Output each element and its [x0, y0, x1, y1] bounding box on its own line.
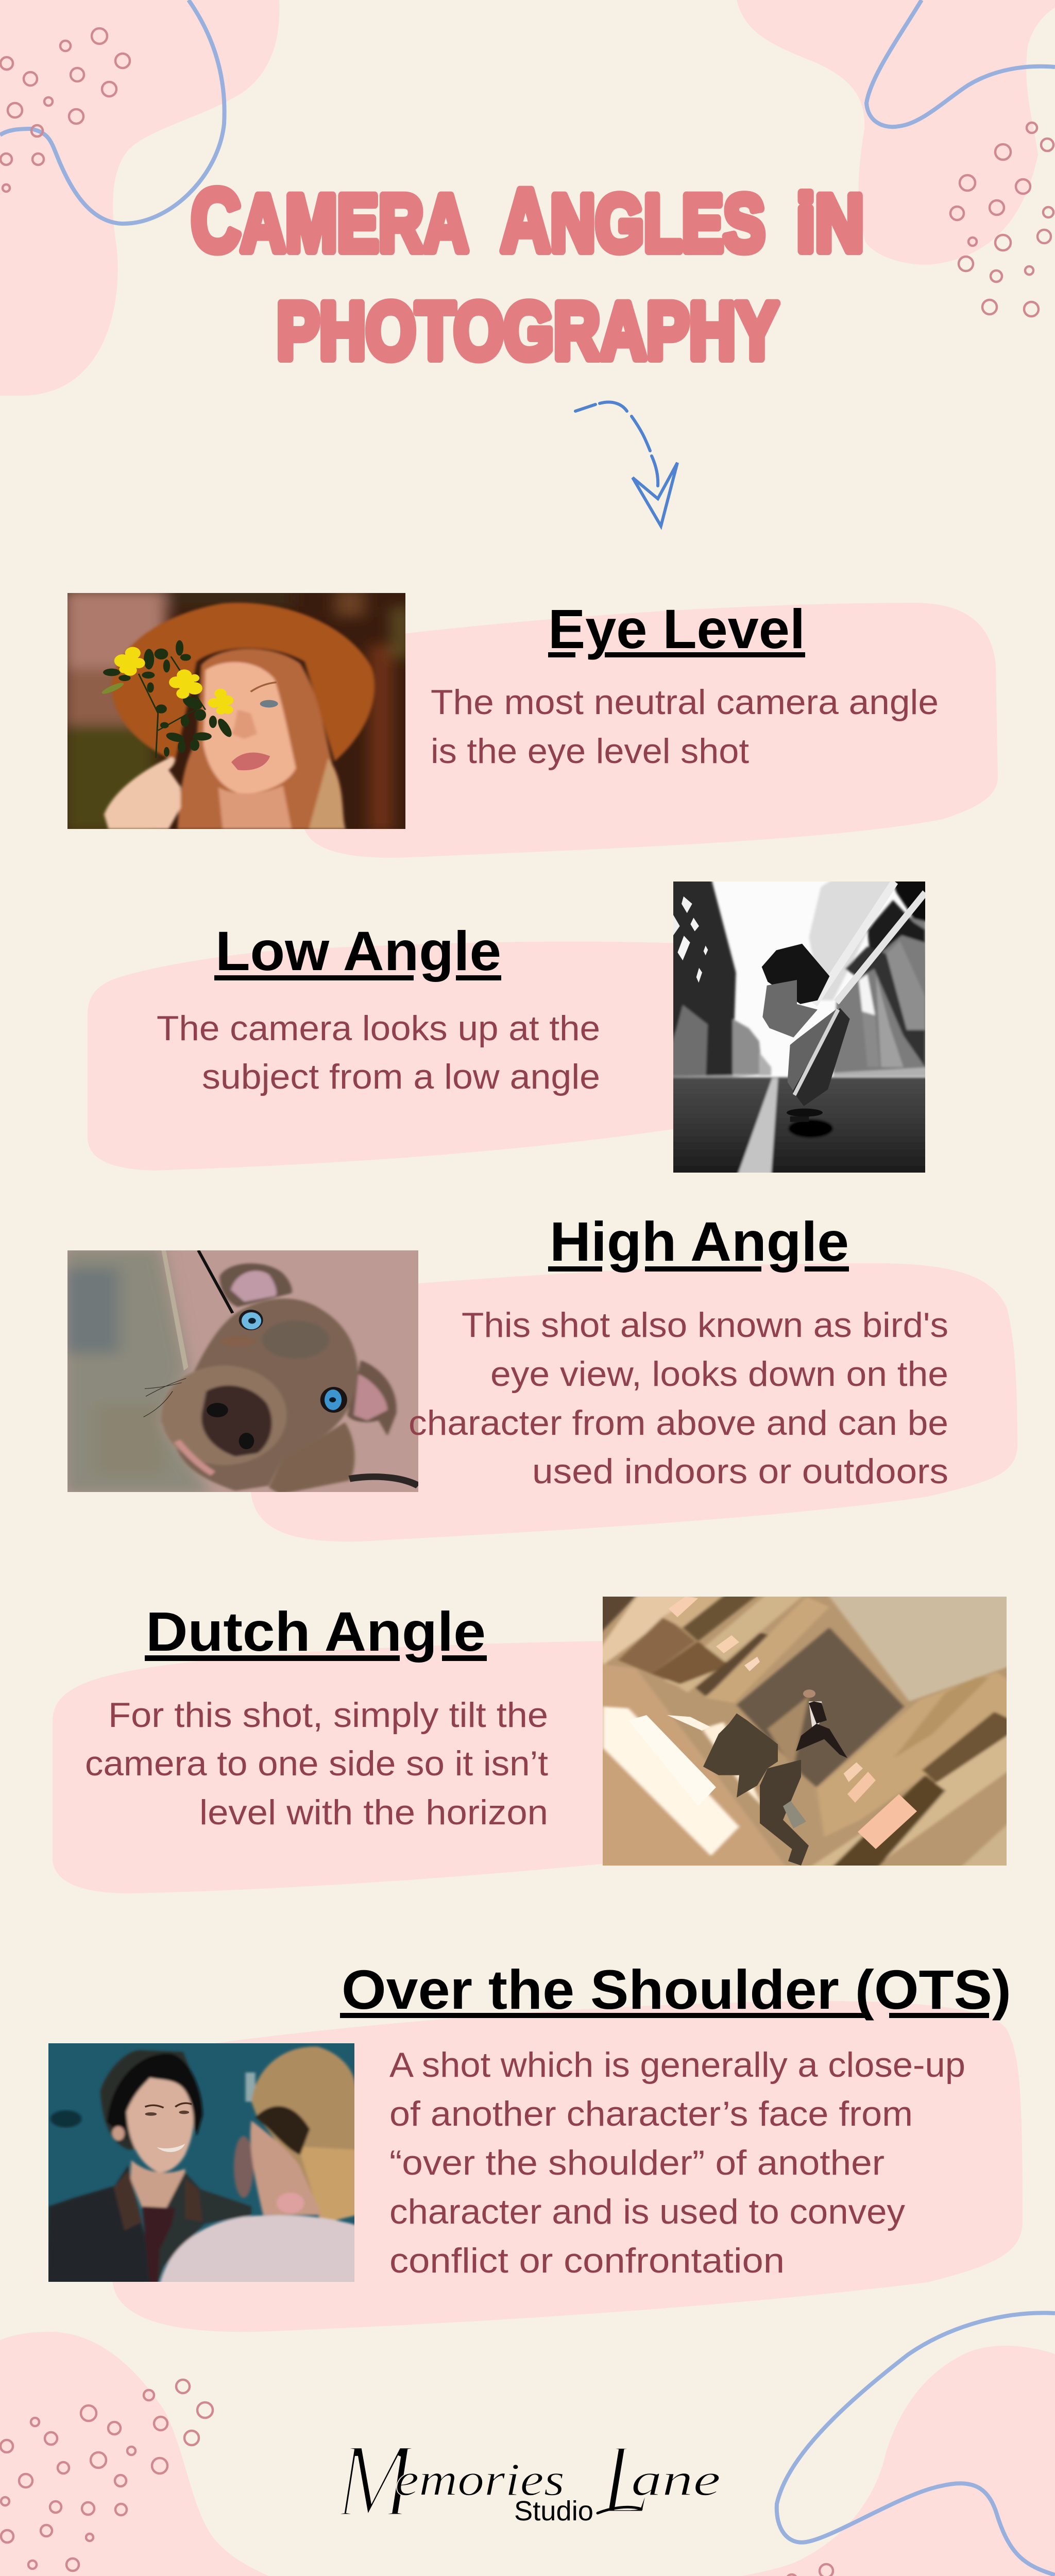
heading: High Angle [550, 1210, 849, 1273]
logo: Memories Lane Studio: ane [631, 2454, 721, 2505]
description: level with the horizon [199, 1793, 548, 1832]
decoration: bottom-left blob, line and dots [0, 2332, 415, 2576]
description: subject from a low angle [202, 1057, 600, 1096]
description: For this shot, simply tilt the [108, 1696, 548, 1735]
description [389, 2045, 965, 2280]
panel background [88, 942, 695, 1171]
photo: over the shoulder conversation [48, 2043, 354, 2282]
panel background [303, 603, 998, 858]
panel: high angle [63, 1210, 1017, 1541]
photo: skateboarder [673, 882, 925, 1173]
description [409, 1306, 948, 1491]
description: camera to one side so it isn’t [85, 1744, 548, 1783]
description [157, 1009, 600, 1096]
description: character from above and can be [409, 1403, 948, 1443]
description: The most neutral camera angle [431, 683, 939, 722]
description: conflict or confrontation [389, 2241, 785, 2280]
logo: Memories Lane Studio [334, 2422, 721, 2539]
description: eye view, looks down on the [490, 1354, 948, 1394]
panel background [250, 1263, 1017, 1541]
logo: Memories Lane Studio: Studio [514, 2496, 593, 2527]
title: CAMERA [191, 171, 468, 270]
photo: dog looking up [67, 1250, 418, 1492]
logo: Memories Lane Studio: L [599, 2424, 652, 2535]
arrow pointing down [575, 402, 677, 526]
description: character and is used to convey [389, 2192, 905, 2231]
panel background [53, 1640, 644, 1893]
panel background [112, 2001, 1023, 2332]
decoration: bottom-right blob, line and dots [642, 2313, 1055, 2576]
heading: Eye Level [548, 598, 805, 660]
heading: Over the Shoulder (OTS) [342, 1958, 1011, 2021]
description: “over the shoulder” of another [389, 2143, 884, 2182]
description: This shot also known as bird's [462, 1306, 948, 1345]
description [85, 1696, 548, 1832]
description: A shot which is generally a close-up [389, 2045, 965, 2084]
heading: Low Angle [215, 920, 501, 982]
panel: low angle [88, 878, 929, 1176]
description: of another character’s face from [389, 2094, 913, 2133]
description: The camera looks up at the [157, 1009, 600, 1048]
description: used indoors or outdoors [532, 1452, 948, 1491]
panel: dutch angle [53, 1593, 1012, 1893]
photo: woman with hat and flowers [67, 593, 405, 829]
decoration: top-left blob, line and dots [0, 0, 279, 396]
photo: tilted corridor [603, 1597, 1007, 1866]
title [191, 171, 864, 376]
panel: over the shoulder [46, 1958, 1023, 2332]
description [431, 683, 939, 771]
title: PHOTOGRAPHY [277, 286, 778, 376]
title: iN [796, 179, 864, 268]
logo: Memories Lane Studio: M [334, 2422, 418, 2539]
heading: Dutch Angle [146, 1600, 486, 1663]
description: is the eye level shot [431, 732, 749, 771]
logo: Memories Lane Studio: emories [395, 2454, 578, 2505]
decoration: top-right blob, line and dots [737, 0, 1055, 316]
panel: eye level [63, 589, 998, 858]
title: ANGLES [501, 171, 765, 270]
